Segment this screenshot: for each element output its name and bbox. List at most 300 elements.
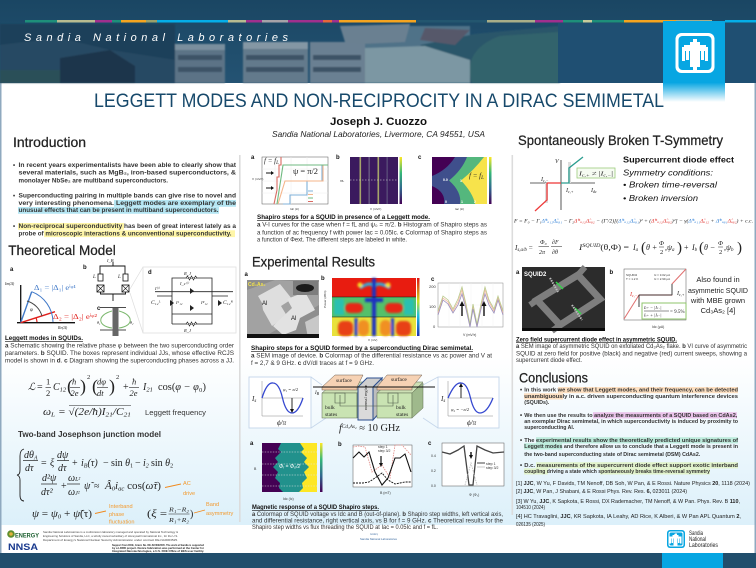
diode effect V-I schematic: | bbox=[611, 172, 613, 178]
panel: theoretical model bbox=[4, 242, 236, 526]
caption: zero field diode effect: SQUID at zero field for positive (black) and negative (red) current sweeps, showing a bbox=[516, 350, 748, 357]
chart c: theoretical step widths: step 3/2 bbox=[486, 466, 499, 470]
heading: Introduction: Introduction bbox=[13, 134, 86, 150]
chart c: theoretical step widths: 0.4 bbox=[431, 454, 436, 458]
icon: NNSA logo: NNSA bbox=[8, 542, 39, 552]
controlled by note: Controlled by bbox=[370, 532, 378, 536]
footer band white bbox=[2, 525, 754, 553]
conclusion text: an exemplar Dirac semimetal, in which superconductivity is induced by proximity to bbox=[524, 419, 739, 425]
caption: magnetic response: and differential resistance, right vertical axis, vs B for f = 9 GHz. c Theoretical results for the bbox=[252, 518, 504, 525]
diode effect V-I schematic: ≠ | bbox=[590, 172, 601, 178]
references bbox=[516, 481, 750, 528]
figure: left current-phase relation: s bbox=[254, 399, 256, 404]
figure b: differential resistance colormap bbox=[321, 276, 420, 342]
introduction text: unusual effects that can be present in multiband superconductors. bbox=[18, 208, 219, 214]
caption: magnetic response: Magnetic response of a SQUID Shapiro steps. bbox=[252, 504, 379, 511]
equation system: sin θ bbox=[151, 458, 170, 469]
equation system: ac bbox=[118, 486, 125, 492]
orange annotations: phase bbox=[109, 512, 124, 518]
equation: supercurrent: 2 bbox=[719, 249, 722, 256]
equation system: R₁−R₂ bbox=[168, 506, 190, 514]
references: [1] JJC, W Yu, F Davids, TM Nenoff, DB Soh, W Pan, & E Rossi. Nature Physics 20, 1118 (2024) bbox=[516, 481, 750, 487]
equation: Lagrangian: dt bbox=[97, 388, 104, 398]
diode effect V-I schematic: c,− bbox=[543, 178, 549, 184]
conclusion text: • bbox=[520, 388, 522, 394]
diode effect V-I schematic bbox=[530, 157, 615, 211]
figure c: junction phases: θ₂ bbox=[130, 320, 134, 325]
conclusion text: D.c. measurements of the supercurrent diode effect support exotic interband bbox=[524, 463, 738, 469]
conclusion text: (SQUIDs). bbox=[524, 400, 550, 406]
caption: zero field diode effect: supercurrent diode effect. bbox=[516, 357, 582, 364]
figure a: SEM of asymmetric SQUID: SQUID2 bbox=[524, 272, 547, 278]
heading: two-band model: Two-band Josephson junction model bbox=[18, 430, 161, 439]
colored strip bbox=[25, 20, 756, 22]
equation system: − bbox=[135, 458, 141, 469]
caption: Shapiro steps Dirac: Shapiro steps for a SQUID formed by a superconducting Dirac semimetal. bbox=[251, 345, 473, 352]
conclusion text: The experimental results show the theoretically predicted unique signatures of bbox=[524, 438, 738, 444]
equation: Lagrangian: C bbox=[53, 382, 60, 393]
conclusion text bbox=[520, 388, 739, 475]
figure: Josephson junction device: surface bbox=[391, 376, 407, 383]
equation: supercurrent: (θ,Φ) = bbox=[600, 243, 630, 252]
figure a: SEM image of device: Al bbox=[291, 316, 296, 322]
diode effect V-I schematic: I bbox=[566, 188, 568, 194]
icon: Sandia logo footer bbox=[667, 530, 685, 548]
banner text: Sandia National Laboratories bbox=[24, 32, 288, 44]
equation system: − bbox=[103, 458, 109, 469]
conclusion text: unambiguously in a.c. driven superconducting quantum interference devices bbox=[524, 394, 738, 400]
equation: Leggett frequency: = √(2e/ħ)I bbox=[55, 407, 106, 418]
text: Sandia National Laboratories footer: Laboratories bbox=[689, 543, 718, 549]
introduction text: Non-reciprocal superconductivity has been of great interest lately as a bbox=[18, 224, 237, 230]
conclusion text: • bbox=[520, 413, 522, 419]
figure d: RCJS model circuit: I_c⁽ʲ⁾ bbox=[179, 281, 190, 286]
chart a: SQUID voltage colormap: Idc (Ic) bbox=[283, 497, 294, 501]
orange annotations: drive bbox=[183, 491, 195, 497]
equation: supercurrent: a bbox=[636, 248, 639, 253]
introduction text bbox=[13, 163, 237, 237]
equation: Lagrangian: 21 bbox=[146, 386, 153, 394]
equation system: ψ = ψ bbox=[32, 509, 57, 520]
funding notice: Integrated Nanotechnologies, a U.S. DOE Office of BES user facility. bbox=[112, 549, 204, 553]
figure a: order parameter phases: Re(Δ) bbox=[57, 325, 68, 330]
panel: experimental results bbox=[244, 254, 504, 531]
figure a: SEM image of device: Cd₃As₂ bbox=[248, 282, 266, 288]
chart b: step widths vs field: b bbox=[338, 442, 342, 448]
symmetry conditions text: Symmetry conditions: bbox=[623, 168, 714, 178]
figure: left current-phase relation: ϕ/π bbox=[277, 419, 287, 427]
legal notice: Engineering Solutions of Sandia, LLC, a wholly owned subsidiary of Honeywell International Inc., for the U.S. bbox=[43, 534, 178, 538]
equation system: dθ bbox=[24, 450, 34, 461]
equation: Lagrangian: 2 bbox=[87, 374, 90, 381]
figure: right current-phase relation: φ₂ = −π/2 bbox=[451, 407, 470, 412]
equation: supercurrent: = bbox=[527, 244, 533, 252]
figure a: order parameter phases: Δ₁ = |Δ₁| eⁱᵠ¹ bbox=[34, 284, 76, 292]
equation system: 2 bbox=[170, 464, 173, 470]
diode effect V-I schematic: I bbox=[601, 172, 603, 178]
chart c: Shapiro colormap vs flux: L bbox=[480, 176, 484, 181]
chart a: V-I curves: f = f bbox=[264, 157, 276, 165]
caption: magnetic response bbox=[252, 504, 504, 531]
references: [3] W Yu, JJC, K Sapkota, E Rossi, DX Rademacher, TM Nenoff, & W Pan. Phys. Rev. B 110, bbox=[516, 499, 740, 505]
equation: Lagrangian: 2 bbox=[46, 388, 50, 398]
caption: magnetic response: Shapiro step widths vs flux threading the SQUID at Iac = 0.05Ic and f = fL. bbox=[252, 524, 438, 531]
equation: supercurrent: a bbox=[672, 248, 675, 253]
introduction text: several materials, such as MgB₂, iron-based superconductors, & bbox=[18, 171, 237, 177]
highlights bbox=[18, 200, 236, 237]
figure c: junction phases: c bbox=[97, 306, 101, 312]
equation: supercurrent: 2 bbox=[660, 249, 663, 256]
orange annotations: AC bbox=[183, 481, 191, 487]
caption: Leggett modes in SQUIDs: Leggett modes in SQUIDs. bbox=[5, 335, 83, 342]
equation system: ψ̃(τ) bbox=[73, 509, 91, 520]
chart c: Shapiro colormap vs flux: Iac (Ic) bbox=[455, 207, 464, 211]
diode effect V-I schematic: I bbox=[591, 188, 593, 194]
panel: introduction bbox=[13, 134, 237, 237]
equation system: Â bbox=[105, 481, 111, 492]
symmetry conditions text: • Broken inversion bbox=[623, 193, 698, 203]
chart c: dV/dI traces: c bbox=[431, 277, 435, 283]
equation system: i bbox=[143, 458, 146, 469]
caption: Shapiro steps Dirac bbox=[251, 345, 492, 367]
figure c: junction phases: θ₁ bbox=[97, 320, 101, 325]
caption: Shapiro steps Leggett: a function of Φext. The different steps are labeled in white. bbox=[257, 237, 407, 244]
chart a: V-I curves: V (mV/τ) bbox=[252, 177, 263, 181]
equation: supercurrent: θ + bbox=[646, 243, 657, 252]
figure: right current-phase relation: ϕ/π bbox=[467, 419, 477, 427]
introduction text: Superconducting pairing in multiple bands can give rise to novel and bbox=[18, 194, 236, 200]
figure d: RCJS model circuit: R_J bbox=[183, 328, 192, 333]
equation: supercurrent: ( bbox=[641, 240, 646, 256]
caption: Shapiro steps Leggett bbox=[257, 214, 487, 244]
equation system: dψ bbox=[57, 450, 69, 461]
equation: supercurrent: ) bbox=[677, 240, 682, 256]
equation: Lagrangian: 12 bbox=[60, 386, 67, 394]
equation: Lagrangian: 1 bbox=[46, 376, 50, 386]
page background bbox=[0, 83, 756, 525]
equation: Leggett frequency: 21 bbox=[124, 412, 131, 418]
chart b: asymmetric VI curve: Ic = 3.02 μA bbox=[654, 273, 670, 277]
legal notice: Department of Energy's National Nuclear Security Administration under contract DE-NA0003525. bbox=[43, 538, 178, 542]
chart a: V-I curves: a bbox=[251, 155, 255, 161]
introduction text: • bbox=[13, 224, 15, 230]
chart c: Shapiro colormap vs flux: 1 bbox=[461, 200, 463, 204]
equation system: (τ) bbox=[87, 458, 98, 469]
figure a: order parameter phases: Im(Δ) bbox=[4, 281, 15, 286]
introduction text: • bbox=[13, 194, 15, 200]
chart b: asymmetric VI curve: SQUID2 bbox=[626, 273, 638, 277]
text: Sandia National Laboratories footer: Sandia bbox=[689, 531, 703, 537]
equation: Lagrangian: I bbox=[143, 382, 146, 393]
figure c: junction phases bbox=[97, 306, 134, 336]
chart c: dV/dI traces: V (mV/τ) bbox=[463, 333, 476, 337]
heading: Conclusions: Conclusions bbox=[519, 370, 588, 386]
chart b: asymmetric VI curve: I bbox=[677, 291, 679, 297]
figure: left current-phase relation bbox=[249, 377, 311, 428]
panel: conclusions bbox=[516, 370, 750, 528]
equation system: cos( bbox=[124, 481, 146, 492]
note: also found in asymmetric SQUID: asymmetric SQUID bbox=[688, 286, 749, 295]
equation system: ωL² bbox=[68, 473, 80, 484]
caption: zero field diode effect: Zero field supercurrent diode effect in asymmetric SQUID. bbox=[516, 336, 677, 343]
figure d: RCJS model circuit: Iᴿ₁₂ bbox=[200, 300, 208, 305]
figure: Josephson junction device: bulk bbox=[396, 405, 406, 411]
equation system: dτ bbox=[25, 463, 34, 474]
equation: supercurrent: ,ψ bbox=[665, 243, 672, 252]
equation: supercurrent: Φ bbox=[659, 240, 664, 247]
conclusion text: Leggett modes and therefore allow us to conclude that a Leggett mode is present in bbox=[524, 444, 739, 450]
equation: Leggett frequency: L bbox=[50, 412, 56, 418]
conclusion text: superconducting Al. bbox=[524, 425, 575, 431]
equation: Lagrangian: ( bbox=[67, 376, 73, 397]
equation: Leggett frequency bbox=[43, 406, 207, 418]
funding notice bbox=[112, 543, 204, 553]
figure d: RCJS model circuit: Iᴸ₁₂ bbox=[175, 300, 183, 305]
orange annotations: asymmetry bbox=[206, 511, 234, 517]
text: Sandia National Laboratories footer: National bbox=[689, 537, 706, 543]
conclusion text: • bbox=[520, 463, 522, 469]
introduction text: • bbox=[13, 163, 15, 169]
equation system: sin θ bbox=[111, 458, 130, 469]
footer bar bbox=[0, 553, 756, 568]
equation: supercurrent: + bbox=[684, 243, 689, 252]
references: [2] JJC, W Pan, J Shabani, & E Rossi Phys. Rev. Res. 6, 023011 (2024) bbox=[516, 489, 687, 495]
chart c: Shapiro colormap vs flux: 2 bbox=[474, 200, 476, 204]
figure d: RCJS model circuit bbox=[130, 267, 236, 333]
figure: Josephson junction device: normal region bbox=[363, 384, 368, 410]
equation: Leggett frequency: /C bbox=[112, 407, 124, 418]
introduction text: monolayer NbSe₂ are multiband superconductors. bbox=[18, 179, 168, 185]
symmetry conditions text: • Broken time-reversal bbox=[623, 180, 718, 190]
conclusion text: • bbox=[520, 438, 522, 444]
chart b: asymmetric VI curve: = 9.5% bbox=[670, 310, 684, 315]
panel: leggett SQUID simulation figures bbox=[251, 155, 492, 244]
figure d: RCJS model circuit: I⁽ʲ⁾ bbox=[154, 286, 160, 291]
figure a: SEM of asymmetric SQUID bbox=[516, 267, 605, 331]
equation system bbox=[17, 449, 193, 524]
figure d: RCJS model circuit: R_J bbox=[183, 271, 192, 276]
figure: Josephson junction device: B bbox=[317, 391, 320, 396]
conclusion text: the two-band superconducting state of Dirac semimetal (DSM) CdAs2. bbox=[524, 452, 701, 458]
equation system: d²ψ bbox=[42, 473, 57, 484]
figure: Josephson junction device: states bbox=[396, 412, 408, 418]
chart b: asymmetric VI curve: Ic+ + |Ic−| bbox=[643, 312, 662, 318]
diode effect V-I schematic: V bbox=[555, 159, 560, 165]
chart b: asymmetric VI curve: b bbox=[610, 270, 614, 276]
chart a: SQUID voltage colormap: B bbox=[254, 467, 257, 471]
diode effect V-I schematic: I bbox=[541, 177, 543, 183]
chart c: theoretical step widths: 0.0 bbox=[431, 484, 436, 488]
heading: Spontaneously Broken T-Symmetry: Spontaneously Broken T-Symmetry bbox=[518, 132, 723, 148]
introduction text: In recent years experimentalists have been able to clearly show that bbox=[18, 163, 236, 169]
figure a: SEM of asymmetric SQUID: a bbox=[516, 270, 520, 276]
figure a: order parameter phases bbox=[4, 267, 97, 330]
equation: supercurrent: ∂F bbox=[552, 239, 559, 246]
orange annotations: Band bbox=[206, 502, 219, 508]
chart b: asymmetric VI curve: c,− bbox=[632, 293, 638, 299]
equation system: R₁+R₂ bbox=[168, 517, 190, 524]
equation: Leggett frequency in Cd3As2: ≈ 10 GHz bbox=[357, 423, 401, 434]
caption: Leggett modes in SQUIDs bbox=[5, 335, 234, 365]
chart c: theoretical step widths: Φ (Φ₀) bbox=[469, 493, 479, 497]
figure b: SQUID schematic: b bbox=[83, 265, 87, 271]
equation: Lagrangian: 2 bbox=[116, 374, 119, 381]
chart b: asymmetric VI curve: I bbox=[630, 292, 632, 298]
figure a: order parameter phases: a bbox=[10, 267, 14, 273]
caption: zero field diode effect bbox=[516, 336, 748, 364]
figure b: SQUID schematic: L bbox=[92, 275, 96, 280]
chart b: Shapiro histogram: b bbox=[336, 155, 340, 161]
chart a: V-I curves: L bbox=[275, 161, 279, 166]
figure b: differential resistance colormap: V (mV) bbox=[368, 338, 377, 342]
figure d: RCJS model circuit: C₁₂ᴸ bbox=[151, 300, 161, 306]
figure: Josephson junction device: surface bbox=[336, 377, 352, 384]
note: also found in asymmetric SQUID: Also found in bbox=[696, 275, 740, 284]
figure b: SQUID schematic: I_B bbox=[106, 258, 114, 263]
chart c: Shapiro colormap vs flux: f = f bbox=[469, 172, 481, 180]
chart c: Shapiro colormap vs flux bbox=[418, 155, 492, 211]
caption: zero field diode effect: a SEM image of asymmetric SQUID on exfoliated Cd₃As₂ flake. b VI curve of asymmetric bbox=[516, 343, 747, 350]
conclusion highlights bbox=[524, 387, 738, 474]
equation: free energy: F = F₀ − Γ₁ Δ̂*ₐ₁₂Δ̂ₐ₈₁ − Γ₂Δ̂*ₐ₁₂Δ̂ₐ₈₂ − (Γ′/2)[( Δ̂*ₐ₁₂Δ̂ₐ₈₁ )² + (Δ̂*ₐ₁₂Δ̂ₐ₈₂ )²] − γ( Δ̂*ₐ₁₁Δ̂ₐ₁₂ + Δ̂*ₐ₈₁Δ̂ₐ₈₂) + c.c. bbox=[513, 218, 753, 225]
equation: supercurrent: Φ₀ bbox=[540, 240, 547, 246]
panel: spontaneously broken T-symmetry bbox=[513, 132, 753, 364]
chart c: Shapiro colormap vs flux: 0.0 bbox=[443, 178, 448, 182]
equation: Lagrangian: ) bbox=[80, 376, 86, 397]
chart c: dV/dI traces: 100 bbox=[429, 304, 436, 309]
equation system: A bbox=[33, 456, 38, 462]
affiliation: Sandia National Laboratories, Livermore, CA 94551, USA bbox=[272, 130, 485, 139]
caption: Shapiro steps Dirac: f = 2,7 & 9 GHz. c dV/dI traces at f = 9 GHz. bbox=[251, 360, 374, 367]
figure a: order parameter phases: Δ₂ = |Δ₂| eⁱᵠ² bbox=[53, 313, 97, 321]
funding notice: Support from DOE, Grant. No. DE-SC0022245. The work at Sandia is supported bbox=[112, 543, 204, 547]
page edge bbox=[0, 83, 2, 553]
equation system: B bbox=[84, 464, 88, 470]
equation system: ) bbox=[190, 509, 193, 520]
equation: supercurrent: I bbox=[579, 243, 582, 252]
equation system: 2 bbox=[146, 464, 149, 470]
figure b: differential resistance colormap: Power (dBm) bbox=[323, 290, 327, 308]
equation: supercurrent: ) bbox=[737, 240, 742, 256]
equation: supercurrent: θ − bbox=[704, 243, 715, 252]
figure: Josephson junction device: bulk bbox=[325, 405, 335, 411]
chart a: SQUID voltage colormap bbox=[250, 441, 322, 501]
chart c: dV/dI traces bbox=[429, 277, 503, 337]
equation: Leggett frequency in Cd3As2: f bbox=[339, 423, 342, 434]
equation system: 0 bbox=[112, 486, 115, 492]
equation system: ξ bbox=[50, 458, 55, 469]
controlled by note: Sandia National Laboratories bbox=[360, 537, 398, 541]
chart b: asymmetric VI curve: Idc (μA) bbox=[652, 325, 664, 329]
equation: supercurrent: ,ψ bbox=[724, 243, 731, 252]
orange annotations bbox=[95, 481, 234, 526]
equation system: + bbox=[61, 509, 73, 520]
figure a: SEM image of device: Al bbox=[262, 301, 267, 307]
equation: supercurrent: SQUID bbox=[582, 244, 601, 249]
equation: Lagrangian bbox=[28, 374, 206, 398]
figure: left current-phase relation: φ₁ = π/2 bbox=[283, 387, 299, 392]
introduction text: probe of microscopic interactions & unconventional superconductivity. bbox=[18, 231, 232, 237]
title: LEGGETT MODES AND NON-RECIPROCITY IN A DIRAC SEMIMETAL bbox=[94, 91, 664, 112]
note: also found in asymmetric SQUID: Cd₃As₂ [4] bbox=[701, 306, 735, 315]
equation system: i bbox=[81, 458, 84, 469]
caption: Shapiro steps Leggett: a V-I curves for the case when f = fL and ψ₀ = π/2. b Histogram of Shapiro steps as bbox=[257, 222, 487, 229]
diode effect V-I schematic: c,+ bbox=[568, 189, 574, 195]
conclusion text: In this work we show that Leggett modes, and their frequency, can be detected bbox=[524, 388, 738, 394]
caption: Shapiro steps Leggett: Shapiro steps for a SQUID in presence of a Leggett mode. bbox=[257, 214, 430, 221]
icon: Sandia thunderbird logo bbox=[676, 33, 714, 73]
figure b: differential resistance colormap: b bbox=[321, 276, 325, 282]
equation: Lagrangian: + bbox=[123, 382, 129, 393]
figure: left current-phase relation: I bbox=[252, 395, 254, 403]
equation: supercurrent: ∂θ bbox=[552, 249, 558, 256]
equation: supercurrent: I bbox=[692, 243, 695, 252]
equation system: dτ² bbox=[41, 487, 54, 498]
icon: DOE Energy logo: ENERGY bbox=[15, 532, 40, 540]
equation: Lagrangian: dφ bbox=[97, 376, 106, 386]
equation system: ωJ² bbox=[68, 487, 80, 498]
caption: Leggett modes in SQUIDs: model is shown in d. c Diagram showing the superconducting phases across a JJ. bbox=[5, 358, 234, 365]
equation system: + bbox=[72, 458, 78, 469]
chart b: Shapiro histogram bbox=[336, 155, 402, 211]
chart c: theoretical step widths: step 1 bbox=[486, 462, 496, 466]
equation: Lagrangian: ħ bbox=[72, 376, 76, 386]
chart c: dV/dI traces: 200 bbox=[429, 284, 436, 289]
equation: Leggett frequency: 21 bbox=[106, 412, 113, 418]
equation: supercurrent: s,a/b bbox=[517, 248, 527, 253]
figure a: order parameter phases: φ bbox=[30, 308, 33, 313]
funding notice: by a LDRD project. Device fabrication was performed at the Center for bbox=[112, 546, 204, 550]
footer logos and notices bbox=[7, 530, 718, 553]
note: also found in asymmetric SQUID bbox=[688, 275, 749, 315]
caption: Leggett modes in SQUIDs: a Schematic showing the relative phase φ between the two superconducting order bbox=[5, 342, 234, 349]
equation: Leggett frequency: ω bbox=[43, 407, 50, 418]
chart c: Shapiro colormap vs flux: 1 bbox=[460, 179, 462, 183]
controlled by note bbox=[360, 532, 398, 541]
equation system: = bbox=[41, 458, 47, 469]
chart b: step widths vs field bbox=[338, 442, 412, 495]
figure b: SQUID schematic bbox=[83, 258, 129, 301]
equation: Lagrangian: ( bbox=[92, 376, 98, 397]
chart b: step widths vs field: B (mT) bbox=[380, 491, 391, 495]
figure: Josephson junction device: states bbox=[325, 412, 337, 418]
diode effect V-I schematic: c,− bbox=[603, 172, 612, 178]
chart a: SQUID voltage colormap: a bbox=[250, 441, 254, 447]
equation: Lagrangian: ) bbox=[109, 376, 115, 397]
equation system: 1 bbox=[130, 464, 133, 470]
figure d: RCJS model circuit: d bbox=[148, 270, 152, 276]
references: 104510 (2024) bbox=[516, 505, 545, 511]
figure: right current-phase relation: I bbox=[441, 395, 443, 403]
orange annotations: Interband bbox=[109, 504, 133, 510]
heading: Experimental Results: Experimental Results bbox=[252, 254, 375, 270]
text: Sandia National Laboratories footer bbox=[689, 531, 718, 549]
chart a: V-I curves: Idc (Ic) bbox=[290, 207, 299, 211]
figure: Josephson junction device bbox=[311, 375, 438, 428]
orange annotations: fluctuation bbox=[109, 520, 134, 526]
icon: DOE Energy logo bbox=[7, 530, 40, 540]
equation: supercurrent bbox=[514, 239, 742, 256]
equation: supercurrent: Φ bbox=[718, 240, 723, 247]
conclusion text: We then use the results to analyze the measurments of a SQUID based on CdAs2, bbox=[524, 413, 738, 419]
equation system: i bbox=[115, 481, 118, 492]
caption: Leggett modes in SQUIDs: parameters. b SQUID. The boxes represent individual JJs, whose effective RCJS bbox=[5, 350, 234, 357]
equation system: ω̃τ) bbox=[146, 481, 161, 492]
equation: supercurrent: ( bbox=[699, 240, 704, 256]
figure b: SQUID schematic: L bbox=[117, 275, 121, 280]
introduction text: very interesting phenomena. Leggett modes are exemplary of the bbox=[18, 201, 237, 207]
equation system: + bbox=[61, 481, 67, 492]
